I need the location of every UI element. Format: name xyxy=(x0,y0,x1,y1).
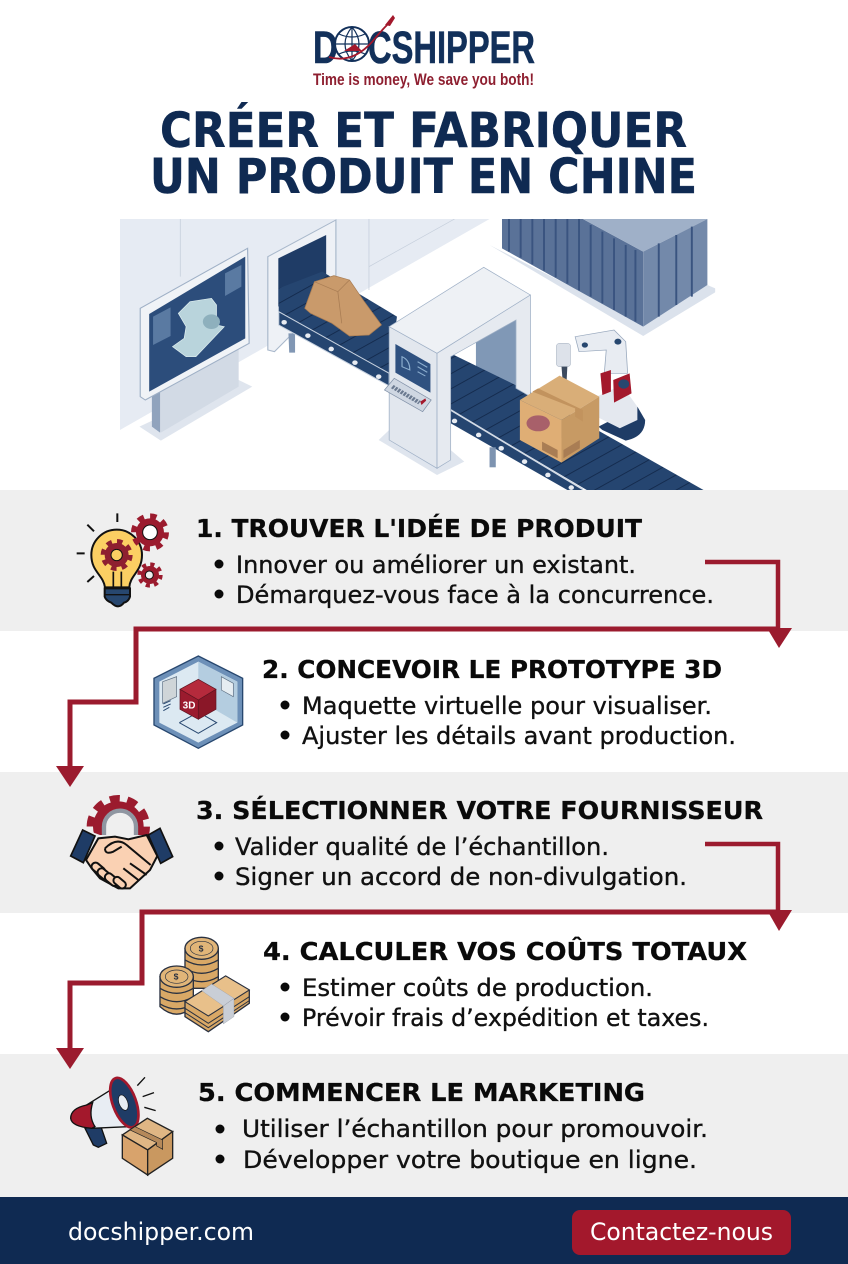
icon: lightbulb and gears xyxy=(77,513,166,606)
step 4: heading and bullets xyxy=(263,936,747,1032)
icon: 3D prototype cube: 3D xyxy=(183,701,195,712)
icon: megaphone and parcel xyxy=(71,1074,173,1175)
logo: DocShipper: CSHIPPER xyxy=(368,22,535,73)
button: contact: Contactez-nous xyxy=(590,1218,773,1246)
conveyor belt 1 xyxy=(279,272,397,373)
icon: handshake and gear xyxy=(71,799,173,890)
icon: coins and banknotes: $ xyxy=(199,943,204,953)
scanner inner wall xyxy=(476,320,516,390)
arrow: step 4 to step 5 xyxy=(56,912,778,1069)
logo: DocShipper: D xyxy=(313,22,338,73)
icon: coins and banknotes xyxy=(160,937,249,1032)
footer url: docshipper.com xyxy=(68,1218,254,1246)
band: step 5 background xyxy=(0,1054,848,1197)
step 1: heading and bullets: 1. TROUVER L'IDÉE DE PRODUIT xyxy=(196,514,642,543)
step 3: heading and bullets: 3. SÉLECTIONNER VOTRE FOURNISSEUR xyxy=(196,796,763,825)
tunnel gate xyxy=(268,220,336,352)
raw block xyxy=(305,276,381,336)
step 2: heading and bullets: Maquette virtuelle pour visualiser. xyxy=(302,692,712,720)
step 1: heading and bullets: Innover ou améliorer un existant. xyxy=(236,551,636,579)
step 4: heading and bullets: Estimer coûts de production. xyxy=(302,974,653,1002)
step 4: heading and bullets: 4. CALCULER VOS COÛTS TOTAUX xyxy=(263,936,747,966)
step 4: heading and bullets: Prévoir frais d’expédition et taxes. xyxy=(302,1004,709,1032)
step 2: heading and bullets xyxy=(262,655,736,750)
logo: DocShipper: Time is money, We save you both! xyxy=(313,70,534,89)
robot arm xyxy=(598,407,645,441)
step 5: heading and bullets xyxy=(198,1078,708,1174)
step 1: heading and bullets: Démarquez-vous face à la concurrence. xyxy=(236,581,714,609)
conveyor belt 2 xyxy=(451,353,704,490)
logo: DocShipper xyxy=(313,15,535,89)
cardboard box xyxy=(520,376,599,420)
step 5: heading and bullets: Développer votre boutique en ligne. xyxy=(243,1146,697,1174)
step 1: heading and bullets xyxy=(196,514,714,609)
icon: coins and banknotes: $ xyxy=(174,972,179,982)
icon: 3D prototype cube xyxy=(154,656,243,748)
band: step 3 background xyxy=(0,772,848,913)
step 2: heading and bullets: 2. CONCEVOIR LE PROTOTYPE 3D xyxy=(262,655,722,684)
illustration: factory production line xyxy=(120,219,719,490)
step 2: heading and bullets: Ajuster les détails avant production. xyxy=(302,722,736,750)
arrow: step 3 to step 4 xyxy=(705,844,792,931)
title: UN PRODUIT EN CHINE xyxy=(150,149,697,205)
step 5: heading and bullets: 5. COMMENCER LE MARKETING xyxy=(198,1078,645,1107)
scanner arch xyxy=(379,430,464,475)
footer bar xyxy=(0,1197,848,1264)
monitor xyxy=(139,380,252,441)
title xyxy=(150,102,697,205)
title: CRÉER ET FABRIQUER xyxy=(160,102,687,159)
arrow: step 2 to step 3 xyxy=(56,629,778,787)
arrow: step 1 to step 2 xyxy=(705,562,792,648)
step 3: heading and bullets xyxy=(196,796,763,891)
band: step 1 background xyxy=(0,490,848,631)
button: contact xyxy=(572,1210,791,1255)
step 5: heading and bullets: Utiliser l’échantillon pour promouvoir. xyxy=(242,1115,708,1143)
container xyxy=(490,245,719,336)
step 3: heading and bullets: Signer un accord de non-divulgation. xyxy=(235,863,687,891)
step 3: heading and bullets: Valider qualité de l’échantillon. xyxy=(235,833,609,861)
